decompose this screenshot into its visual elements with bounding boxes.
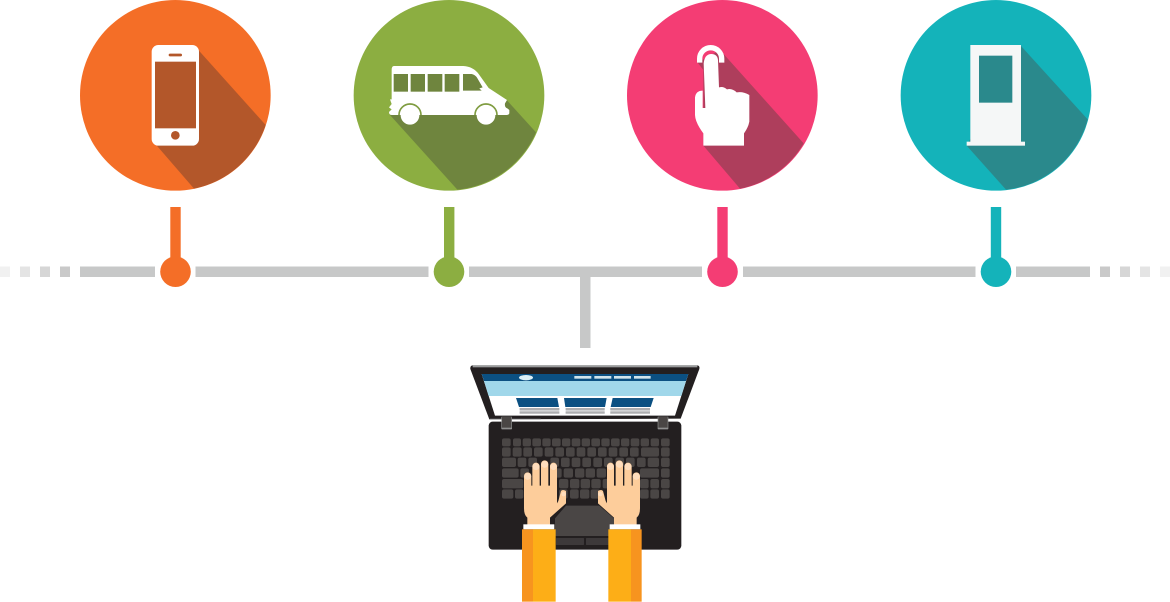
icon: kiosk circle: [901, 0, 1091, 191]
right hand: [598, 460, 642, 602]
marker: pink: [707, 207, 738, 287]
timeline: [0, 266, 1170, 348]
marker: green: [434, 207, 464, 287]
marker: orange: [160, 207, 191, 287]
left hand: [522, 460, 566, 602]
hinges: [501, 417, 668, 429]
keyboard: [502, 438, 670, 499]
icon: touch hand circle: [627, 0, 818, 191]
marker: teal: [981, 207, 1011, 287]
laptop with hands: [470, 365, 699, 602]
laptop base: [489, 422, 681, 550]
trackpad: [555, 506, 614, 545]
laptop lid: [470, 365, 699, 419]
icon: smartphone circle: [80, 0, 271, 191]
icon: shuttle van circle: [354, 0, 544, 191]
